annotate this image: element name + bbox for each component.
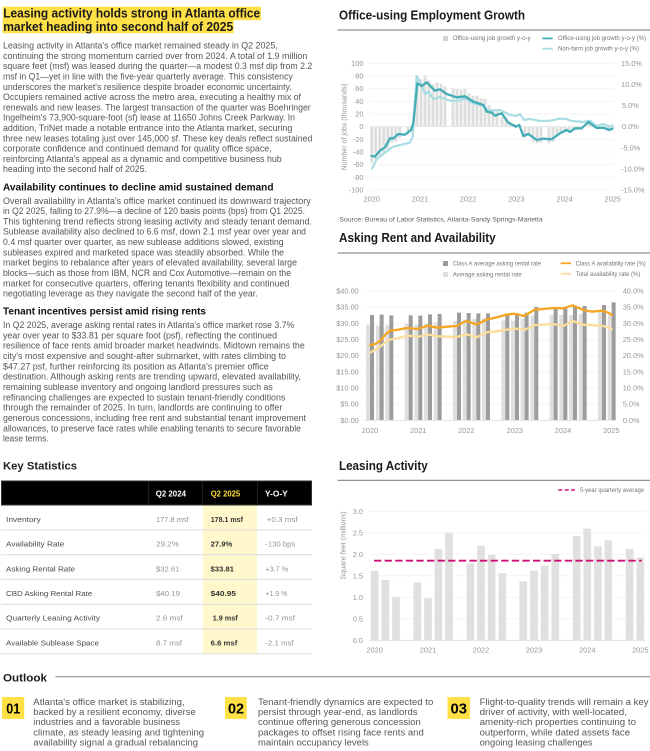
left axis labels: 60 [355, 84, 364, 93]
table row: available sublease space: 8.7 msf [156, 638, 183, 647]
outlook item 03: ongoing leasing challenges [480, 737, 593, 747]
left axis labels: 80 [355, 72, 364, 80]
left axis labels: 1.5 [353, 571, 363, 580]
left axis labels: 3.0 [353, 507, 363, 516]
table row: asking rental rate: +3.7 % [265, 564, 289, 573]
table header: Q2 2024 [156, 490, 187, 499]
table row: inventory: Inventory [6, 515, 41, 524]
text block: availability paragraph: market begins to rebalance after years of elevated availability, several large [3, 258, 297, 268]
x axis labels: 2025 [603, 426, 620, 435]
x axis labels: 2022 [460, 195, 476, 204]
right axis labels [621, 59, 645, 194]
outlook item 02: 02 [228, 700, 244, 718]
outlook item 03: 03 [450, 700, 467, 718]
bars: quarterly leasing [375, 529, 640, 640]
outlook item 01 [2, 697, 204, 747]
text block: availability paragraph: 0.4 msf quarter over quarter, as new sublease additions slowed, existing [3, 237, 284, 247]
legend: asking rent: Average asking rental rate [453, 271, 522, 278]
table row: quarterly leasing activity: 2.6 msf [156, 614, 184, 623]
table row: quarterly leasing activity: Quarterly Leasing Activity [6, 614, 100, 623]
left axis labels: $0.00 [340, 416, 359, 425]
left axis labels: $20.00 [336, 351, 359, 360]
table row: inventory [6, 515, 299, 524]
x axis labels: 2023 [526, 646, 542, 655]
text block: tenant incentives paragraph: lease terms. [3, 434, 49, 444]
left axis labels: -40 [353, 148, 364, 156]
panel: office-using employment growth [338, 9, 650, 223]
title [3, 7, 261, 34]
table row: inventory: 177.8 msf [156, 515, 190, 524]
x axis labels: 2022 [473, 646, 489, 655]
right axis labels: 5.0% [622, 101, 639, 110]
x axis labels [366, 646, 649, 655]
text block: intro paragraph: three new leases totaling just over 145,000 sf. These key deals reflect sustained [3, 133, 312, 143]
table row: available sublease space: Available Sublease Space [6, 638, 99, 647]
left axis labels: $40.00 [336, 286, 359, 296]
line: total availability rate [369, 321, 613, 353]
left axis labels: $35.00 [336, 303, 359, 312]
text block: intro paragraph: renewals and new leases. The largest transaction of the quarter was Boehringer [3, 102, 311, 112]
text block: tenant incentives paragraph: refinancing challenges are expected to sustain tenant-friendly conditions [3, 392, 286, 402]
x axis labels: 2024 [555, 426, 571, 435]
right axis labels: -5.0% [621, 144, 641, 152]
heading: leasing activity: Leasing Activity [339, 459, 428, 473]
text block: tenant incentives paragraph: city's most expensive and sought-after submarket, with rates climbing to [3, 351, 286, 361]
text block: tenant incentives paragraph: allowances, to preserve face rates while enabling tenants to secure favorable [3, 423, 301, 433]
text block: intro paragraph: corporate confidence and continued demand for quality office space, [3, 144, 272, 154]
x axis labels: 2020 [362, 426, 378, 435]
left axis labels: $30.00 [336, 319, 359, 328]
x axis labels: 2021 [420, 646, 436, 655]
bars: average asking rental rate [368, 312, 610, 420]
text block: intro paragraph: square feet (msf) was leased during the quarter—a modest 0.3 msf dip from 2.2 [3, 61, 312, 71]
table row: inventory: +0.3 msf [267, 515, 299, 524]
table row: CBD asking rental rate [6, 589, 288, 598]
left axis labels [349, 59, 364, 194]
left axis labels: 2.5 [353, 528, 363, 537]
right axis labels: 10.0% [623, 384, 644, 392]
table row: asking rental rate: Asking Rental Rate [6, 564, 75, 573]
text block: availability paragraph: This tightening trend reflects strong leasing activity and steady tenant demand. [3, 216, 312, 226]
x axis labels: 2025 [604, 195, 621, 204]
x axis labels: 2021 [412, 195, 428, 204]
table header: Y-O-Y [265, 490, 288, 499]
legend: employment growth: Office-using job growth y-o-y [453, 35, 532, 42]
outlook item 01: climate, as steady leasing and tightening [33, 727, 204, 737]
text block: availability paragraph: blocks—such as those from IBM, NCR and Cox Automotive—remain on the [3, 268, 291, 278]
legend: employment growth: Non-farm job growth y-o-y (%) [558, 46, 639, 53]
right axis labels [623, 286, 644, 425]
table row: CBD asking rental rate: $40.19 [156, 589, 180, 598]
right axis labels: -10.0% [621, 164, 645, 174]
table row: available sublease space: 6.6 msf [211, 638, 238, 647]
left axis labels: 1.0 [353, 593, 363, 602]
text block: intro paragraph: continuing the strong momentum carried over from 2024. A total of 1.9 million [3, 51, 307, 61]
text block: intro paragraph: addition, TriNet made a notable entrance into the Atlanta market, securing [3, 123, 292, 133]
outlook item 02 [225, 697, 433, 747]
line: office-using job growth [371, 82, 613, 157]
left axis labels: $15.00 [336, 367, 359, 376]
panel: outlook [2, 672, 650, 747]
outlook item 02: packages to offset rising face rents and [258, 727, 424, 737]
heading: asking rent: Asking Rent and Availability [339, 231, 496, 245]
table row: availability rate: -130 bps [265, 540, 295, 549]
panel: leasing activity [338, 459, 650, 655]
left axis labels: 20 [355, 110, 364, 118]
right axis labels: 15.0% [621, 59, 642, 68]
table row: availability rate [6, 540, 295, 549]
text block: intro paragraph: Ingelheim's 73,900-square-foot (sf) lease at 11650 Johns Creek Parkway. In [3, 113, 295, 123]
right axis labels: -15.0% [621, 186, 645, 194]
x axis labels: 2023 [506, 426, 523, 435]
left axis labels: -80 [353, 173, 364, 182]
legend: asking rent: Class A availability rate (%) [576, 260, 646, 267]
table row: available sublease space: -2.1 msf [265, 638, 295, 647]
table row: availability rate: 27.9% [211, 540, 233, 549]
text block: intro paragraph: reinforcing Atlanta's appeal as a dynamic and competitive business hub [3, 154, 282, 164]
outlook item 01: 01 [6, 700, 20, 718]
outlook item 03: driver of activity, with well-located, [480, 707, 627, 717]
outlook item 02: Tenant-friendly dynamics are expected to [258, 697, 433, 707]
bars: office-using job growth [372, 75, 613, 163]
title: Leasing activity holds strong in Atlanta office [3, 7, 260, 21]
legend: leasing activity: 5-year quarterly average [580, 487, 645, 494]
outlook item 03: amenity-rich properties continuing to [480, 717, 636, 727]
left axis labels: $25.00 [336, 335, 359, 344]
text block: intro paragraph: msf in Q1—yet in line with the five-year quarterly average. This consistency [3, 72, 293, 82]
table row: asking rental rate: $32.61 [156, 564, 179, 573]
text block: availability paragraph: in Q2 2025, falling to 27.9%—a decline of 120 basis points (bps) from Q1 2025. [3, 206, 305, 216]
outlook item 03 [448, 697, 649, 747]
heading: availability: Availability continues to decline amid sustained demand [3, 183, 274, 194]
right axis labels: 10.0% [621, 80, 642, 89]
text block: availability paragraph [3, 196, 312, 299]
x axis labels: 2021 [410, 426, 427, 435]
outlook item 02: persist through year-end, as landlords [258, 707, 418, 717]
outlook item 01: industries and a favorable business [33, 717, 181, 727]
text block: intro paragraph: Leasing activity in Atlanta's office market remained steady in Q2 2025, [3, 41, 278, 51]
left axis labels: -60 [353, 160, 364, 169]
text block: tenant incentives paragraph: through the remainder of 2025. In turn, landlords are continuing to offer [3, 403, 282, 413]
line: 5-year quarterly average [374, 560, 642, 562]
left axis labels: 40 [355, 97, 364, 106]
right axis labels: 30.0% [623, 319, 644, 328]
table header [2, 481, 312, 505]
legend: asking rent: Total availability rate (%) [576, 271, 640, 278]
text block: tenant incentives paragraph: In Q2 2025, average asking rental rates in Atlanta's office market rose 3.7% [3, 320, 294, 330]
table row: CBD asking rental rate: CBD Asking Rental Rate [6, 589, 92, 598]
left axis labels [336, 286, 359, 425]
text block: intro paragraph [3, 41, 312, 174]
text block: availability paragraph: subleases expired and marketed space was steadily absorbed. While the [3, 247, 284, 257]
left axis labels: $5.00 [340, 400, 359, 409]
left axis labels: 2.0 [353, 550, 363, 559]
table row: available sublease space [6, 638, 295, 647]
x axis labels: 2025 [632, 646, 649, 655]
text block: availability paragraph: negotiating leverage as they navigate the second half of the year. [3, 289, 258, 299]
heading: tenant incentives: Tenant incentives persist amid rising rents [3, 307, 206, 318]
title: market heading into second half of 2025 [3, 20, 233, 34]
table header: Q2 2025 [211, 490, 241, 499]
x axis labels: 2023 [508, 195, 525, 204]
right axis labels: 25.0% [623, 335, 644, 344]
x axis labels: 2024 [579, 646, 596, 655]
left axis labels: 0.0 [353, 636, 363, 645]
y axis title: Number of jobs (thousands) [339, 84, 348, 170]
table highlight column [203, 505, 257, 654]
right axis labels: 0.0% [623, 416, 640, 425]
outlook item 01: Atlanta's office market is stabilizing, [33, 697, 185, 707]
left axis labels: $10.00 [336, 384, 359, 392]
text block: intro paragraph: underscores the market's resilience despite broader economic uncertainty. [3, 82, 292, 92]
text block: tenant incentives paragraph: destination. Although asking rents are trending upward, elevated availability, [3, 372, 301, 382]
heading: employment growth: Office-using Employment Growth [339, 9, 525, 23]
table row: asking rental rate [6, 564, 289, 573]
text block: tenant incentives paragraph: remaining sublease inventory and ongoing landlord pressures such as [3, 382, 273, 392]
outlook item 01: availability signal a gradual rebalancing [33, 737, 198, 747]
text block: intro paragraph: heading into the second half of 2025. [3, 164, 147, 174]
outlook item 01: backed by a resilient economy, diverse [33, 707, 196, 717]
panel: key statistics [1, 460, 312, 654]
text block: intro paragraph: Occupiers remained active across the metro area, executing a healthy mix of [3, 92, 302, 102]
right axis labels: 15.0% [623, 367, 644, 376]
heading: key statistics: Key Statistics [3, 460, 77, 472]
text block: tenant incentives paragraph: year over year to $33.81 per square foot (psf), reflecting the continued [3, 330, 277, 340]
bars: class A average asking rental rate [372, 302, 614, 420]
text block: availability paragraph: Sublease availability also declined to 6.6 msf, down 2.1 msf year over year and [3, 227, 306, 237]
x axis labels: 2020 [363, 195, 380, 204]
legend: asking rent [443, 260, 646, 278]
panel: asking rent and availability [336, 231, 650, 435]
table row: asking rental rate: $33.81 [211, 564, 235, 573]
x axis labels [363, 195, 621, 204]
x axis labels: 2024 [556, 195, 573, 204]
line: class A availability rate [369, 305, 613, 346]
text block: tenant incentives paragraph: resilience of face rents amid broader market headwinds. Midtown remains the [3, 341, 305, 351]
text block: tenant incentives paragraph [3, 320, 307, 444]
outlook item 02: maintain occupancy levels [258, 737, 369, 747]
line: non-farm job growth [372, 76, 613, 169]
x axis labels: 2022 [458, 426, 475, 435]
left axis labels: 0.5 [353, 614, 363, 623]
text block: availability paragraph: market for consecutive quarters, offering tenants flexibility and continued [3, 278, 289, 288]
outlook item 03: outperform, while dated assets face [480, 727, 630, 737]
left axis labels [353, 507, 363, 645]
y axis title: Square feet (millions) [338, 512, 348, 580]
source note: Source: Bureau of Labor Statistics, Atlanta-Sandy Springs-Marietta [339, 216, 543, 223]
right axis labels: 35.0% [623, 303, 644, 312]
table row: CBD asking rental rate: $40.95 [211, 589, 237, 598]
heading: outlook: Outlook [3, 672, 48, 684]
legend: asking rent: Class A average asking rental rate [453, 260, 542, 267]
left axis labels: 0 [359, 122, 364, 131]
table row: inventory: 178.1 msf [211, 515, 243, 524]
text block: tenant incentives paragraph: $47.27 psf, further reinforcing its position as Atlanta's premier office [3, 361, 269, 371]
x axis labels: 2020 [366, 646, 383, 655]
table row: quarterly leasing activity: 1.9 msf [213, 614, 238, 623]
left axis labels: 100 [351, 59, 364, 68]
outlook item 02: continue offering generous concession [258, 717, 421, 727]
table row: quarterly leasing activity [6, 614, 296, 623]
right axis labels: 40.0% [623, 286, 644, 296]
left axis labels: -20 [353, 135, 364, 144]
table row: quarterly leasing activity: -0.7 msf [265, 614, 296, 623]
x axis labels [362, 426, 620, 435]
right axis labels: 20.0% [623, 351, 644, 360]
text block: availability paragraph: Overall availability in Atlanta's office market continued its downward trajectory [3, 196, 311, 206]
table row: CBD asking rental rate: +1.9 % [265, 589, 288, 598]
outlook item 03: Flight-to-quality trends will remain a key [480, 697, 649, 707]
legend: employment growth: Office-using job growth y-o-y (%) [558, 35, 646, 42]
text block: tenant incentives paragraph: generous concessions, including free rent and substantial tenant improvement [3, 413, 307, 423]
right axis labels: 0.0% [622, 122, 639, 131]
left axis labels: -100 [349, 186, 364, 194]
table row: availability rate: Availability Rate [6, 540, 64, 549]
table row: availability rate: 29.2% [156, 540, 179, 549]
right axis labels: 5.0% [623, 400, 640, 409]
legend: employment growth [443, 35, 646, 53]
